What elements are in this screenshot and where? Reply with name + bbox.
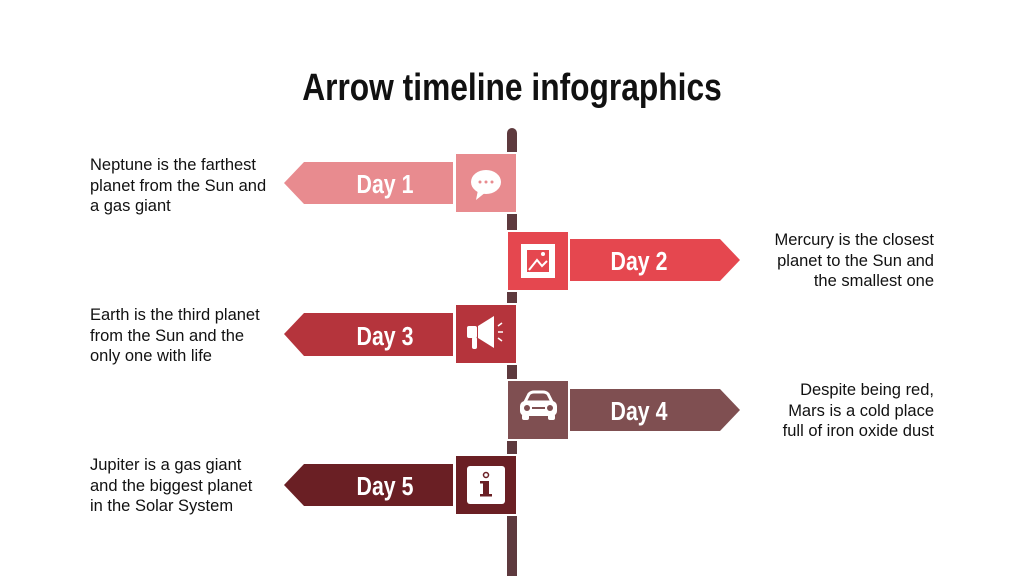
step: Day 2 [507, 231, 740, 291]
icon: megaphone [467, 316, 503, 349]
text: Day 3 [90, 306, 260, 365]
text: Day 4: full of iron oxide dust [783, 422, 934, 440]
text: Day 3: Earth is the third planet [90, 306, 260, 324]
text: Day 1 [90, 156, 266, 215]
step: Day 5 [284, 455, 517, 515]
text: Day 2 [774, 231, 934, 290]
step: Day 4: Day 4 [611, 397, 668, 427]
text: Day 2: planet to the Sun and [777, 252, 934, 270]
step: Day 2: Day 2 [611, 247, 667, 277]
text: Day 4 [782, 381, 934, 440]
pole [507, 128, 517, 576]
text: Day 3: from the Sun and the [90, 326, 244, 344]
text: Day 2: Mercury is the closest [774, 231, 934, 249]
text: Day 4: Despite being red, [800, 381, 934, 399]
text: Day 5: Jupiter is a gas giant [90, 456, 241, 474]
step: Day 4 [507, 380, 740, 440]
icon: speech bubble [471, 170, 501, 200]
icon: car [520, 392, 557, 420]
text: Day 5: in the Solar System [90, 497, 233, 515]
text: Day 3: only one with life [90, 347, 212, 365]
step: Day 3: Day 3 [357, 322, 413, 352]
title: Arrow timeline infographics [302, 67, 722, 109]
text: Day 1: Neptune is the farthest [90, 156, 256, 174]
step: Day 1: Day 1 [357, 170, 413, 200]
step: Day 1 [284, 153, 517, 213]
text: Day 4: Mars is a cold place [788, 402, 934, 420]
text: Day 5: and the biggest planet [90, 476, 252, 494]
step: Day 3 [284, 304, 517, 364]
text: Day 1: planet from the Sun and [90, 176, 266, 194]
icon: picture stamp [521, 244, 555, 278]
icon: info [467, 466, 505, 504]
text: Day 1: a gas giant [90, 197, 171, 215]
step: Day 5: Day 5 [357, 472, 413, 502]
text: Day 2: the smallest one [814, 272, 934, 290]
text: Day 5 [90, 456, 252, 515]
